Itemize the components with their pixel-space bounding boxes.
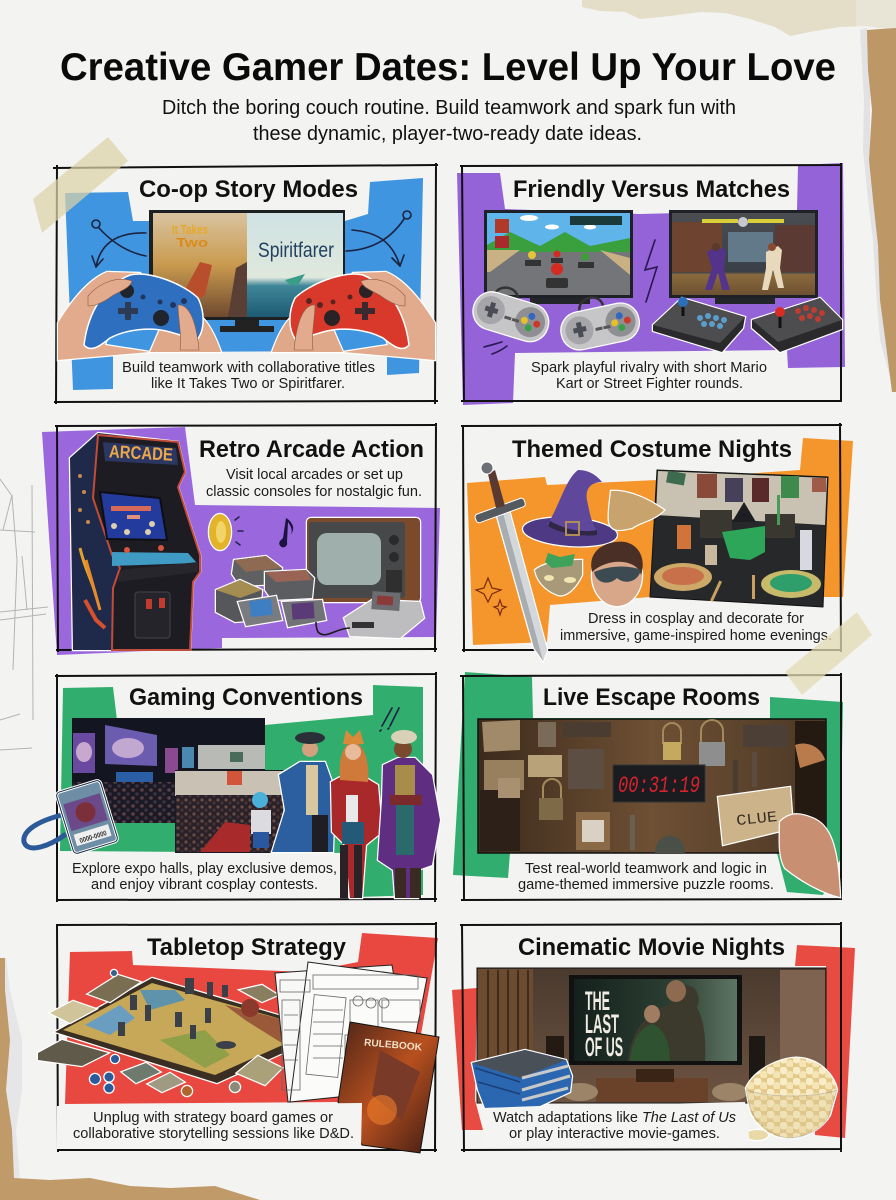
panel: gaming conventions (24, 672, 440, 902)
green leaf mask (535, 553, 582, 595)
projection screen: LAST (585, 1009, 619, 1039)
caption: Watch adaptations like The Last of Us (493, 1109, 736, 1126)
popcorn bowl (746, 1058, 837, 1140)
caption (206, 466, 422, 500)
character sheets (275, 962, 427, 1102)
green colour block (60, 685, 423, 897)
red colour block (65, 933, 438, 1104)
cartridge stacks (216, 556, 326, 627)
caption: Test real-world teamwork and logic in (525, 860, 767, 877)
caption (73, 1109, 354, 1142)
caption: Explore expo halls, play exclusive demos, (72, 860, 337, 877)
crowd photo (175, 770, 283, 853)
cosplayer: robed noble (378, 730, 440, 898)
caption backing (483, 1102, 750, 1146)
panel frame (56, 922, 437, 1152)
tan mask (609, 491, 664, 530)
witch hat (522, 470, 618, 549)
player one hands and blue controller (58, 272, 221, 360)
party table photo (650, 470, 828, 607)
caption (531, 359, 767, 392)
masking tape: centre right (785, 612, 872, 695)
cosplayer: pirate (272, 732, 335, 852)
heading: Retro Arcade Action (199, 436, 424, 463)
music note (279, 518, 293, 547)
rulebook: RULEBOOK (364, 1037, 423, 1054)
projection screen (569, 975, 742, 1065)
convention badge and lanyard: 0000-0000 (79, 830, 108, 845)
digital countdown timer: 00:31:19 (618, 773, 700, 799)
red colour blocks (452, 945, 855, 1138)
caption: game-themed immersive puzzle rooms. (518, 876, 774, 893)
exclamation marks (380, 708, 399, 731)
heading: Co-op Story Modes (139, 176, 358, 203)
retro controller right (556, 289, 642, 353)
subtitle (162, 97, 736, 145)
sparkles (476, 578, 506, 615)
panel: retro arcade action (42, 423, 440, 655)
torn paper: bottom left kraft (0, 958, 260, 1200)
game board (55, 978, 285, 1083)
television with game art: It Takes (172, 222, 208, 237)
game console (316, 591, 424, 638)
stack of discs (472, 1050, 572, 1108)
retro controller left (469, 277, 556, 346)
caption: collaborative storytelling sessions like D&D. (73, 1125, 354, 1142)
subtitle: these dynamic, player-two-ready date ideas. (253, 123, 642, 145)
caption (560, 610, 832, 644)
heading: Tabletop Strategy (147, 934, 347, 961)
caption (493, 1109, 736, 1142)
convention badge and lanyard (24, 780, 118, 854)
digital countdown timer (613, 765, 705, 802)
panel frame (460, 922, 842, 1152)
subtitle: Ditch the boring couch routine. Build teamwork and spark fun with (162, 97, 736, 119)
caption (72, 860, 337, 893)
caption: Visit local arcades or set up (226, 466, 403, 483)
heading: Themed Costume Nights (512, 436, 792, 463)
player two hands and red controller (272, 272, 435, 360)
crt television (307, 518, 420, 602)
caption (518, 860, 774, 893)
arcade cabinet: ARCADE (109, 441, 173, 465)
projection screen: THE (585, 986, 610, 1016)
television with game art: Spiritfarer (258, 239, 334, 262)
arrows right (346, 211, 411, 266)
caption: Kart or Street Fighter rounds. (556, 375, 743, 392)
cards and dice (38, 970, 282, 1096)
sword (474, 462, 547, 661)
coin (209, 514, 243, 550)
masking tape: top left (33, 137, 128, 233)
home theatre photo (477, 968, 826, 1103)
hand holding clue card: CLUE (735, 809, 778, 830)
orange colour block (467, 438, 853, 645)
green colour block (453, 672, 843, 895)
projection screen: OF US (585, 1032, 623, 1062)
caption: Dress in cosplay and decorate for (588, 610, 804, 627)
speed lines (484, 342, 507, 354)
caption: or play interactive movie-games. (509, 1125, 720, 1142)
heading: Cinematic Movie Nights (518, 934, 785, 961)
blue colour block (65, 178, 423, 390)
panel frame (461, 423, 842, 652)
television: street fighting game (669, 210, 818, 304)
panel: live escape rooms (453, 672, 843, 900)
arcade stick red (752, 298, 842, 352)
escape room wall photo (478, 719, 826, 853)
caption: Spark playful rivalry with short Mario (531, 359, 767, 376)
rulebook (338, 1022, 439, 1153)
title: Creative Gamer Dates: Level Up Your Love (60, 46, 836, 89)
cosplayer: queen (331, 730, 382, 898)
caption: classic consoles for nostalgic fun. (206, 483, 422, 500)
television: kart racing game (484, 210, 633, 304)
arrows left (92, 220, 146, 267)
panel frame (55, 672, 437, 902)
caption backing (57, 1103, 362, 1149)
caption: like It Takes Two or Spiritfarer. (151, 375, 345, 392)
panel: themed costume nights (461, 423, 853, 661)
panel frame (460, 163, 842, 402)
heading: Live Escape Rooms (543, 684, 760, 711)
lightning bolt (645, 240, 657, 302)
heading: Gaming Conventions (129, 684, 363, 711)
sketch marks on left margin (0, 479, 48, 750)
panel: tabletop strategy (38, 922, 439, 1153)
purple colour block (42, 427, 440, 655)
panel frame (53, 163, 438, 404)
caption: Unplug with strategy board games or (93, 1109, 333, 1126)
panel: friendly versus matches (457, 163, 845, 405)
heading: Friendly Versus Matches (513, 176, 790, 203)
caption: and enjoy vibrant cosplay contests. (91, 876, 318, 893)
masked face (591, 542, 643, 606)
caption: Build teamwork with collaborative titles (122, 359, 375, 376)
panel: cinematic movie nights (452, 922, 855, 1152)
arcade cabinet (70, 433, 200, 650)
panel: co-op story modes (53, 163, 438, 404)
panel frame (460, 673, 842, 900)
television with game art: Two (176, 235, 208, 250)
purple colour block (457, 163, 845, 405)
panel frame (55, 423, 437, 652)
arcade stick blue (653, 297, 745, 352)
caption: immersive, game-inspired home evenings. (560, 627, 832, 644)
caption (122, 359, 375, 392)
torn paper: right kraft strip (860, 28, 896, 392)
expo hall photo (72, 718, 265, 823)
television with game art (149, 210, 345, 332)
torn paper: top right (582, 0, 896, 36)
hand holding clue card (718, 787, 840, 897)
